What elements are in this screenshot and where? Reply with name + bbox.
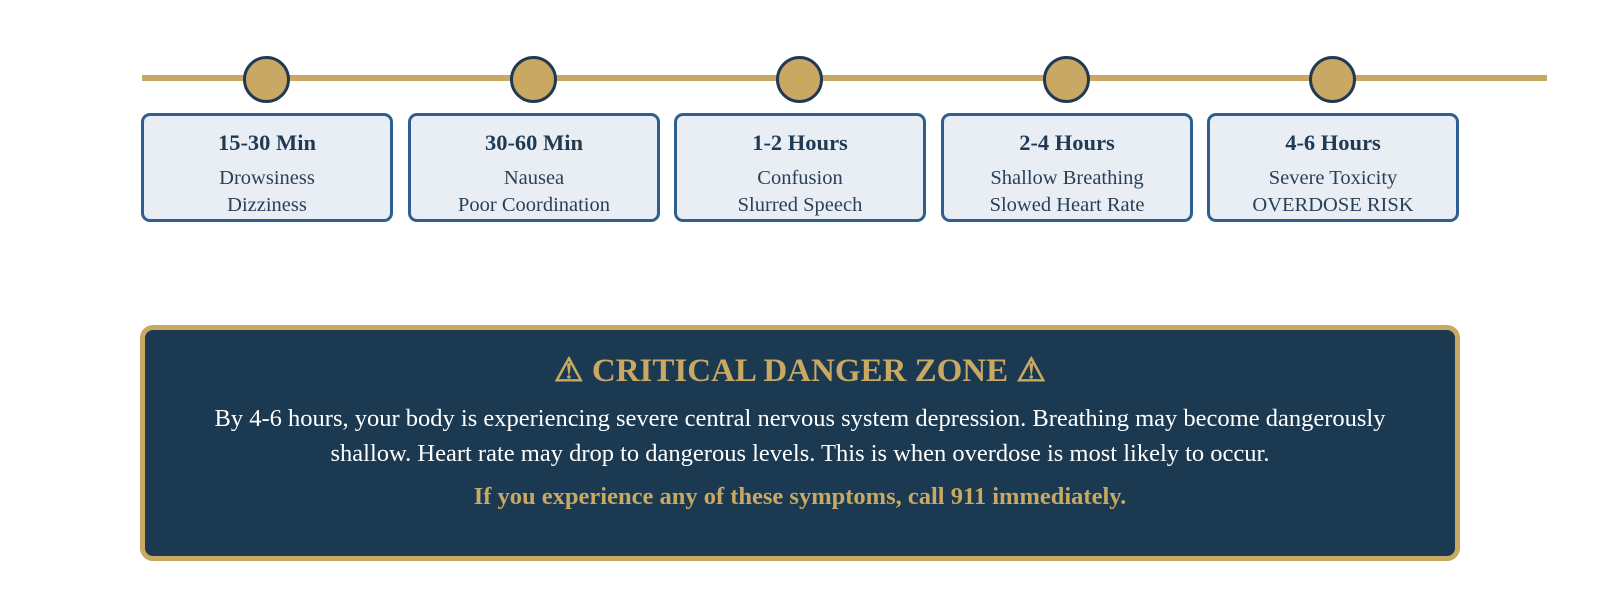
- marker 1: [243, 56, 290, 103]
- card: 2-4 hours: Slowed Heart Rate: [990, 194, 1144, 216]
- timeline line: [142, 75, 1547, 81]
- card: 4-6 hours: Severe Toxicity: [1269, 167, 1397, 189]
- card: 15-30 min: [141, 113, 393, 222]
- panel: critical danger zone: [140, 325, 1460, 561]
- card: 1-2 hours: [674, 113, 926, 222]
- card: 15-30 min: 15-30 Min: [218, 130, 316, 155]
- marker 2: [510, 56, 557, 103]
- card: 4-6 hours: OVERDOSE RISK: [1252, 194, 1414, 216]
- card: 4-6 hours: [1207, 113, 1459, 222]
- heading: ⚠ CRITICAL DANGER ZONE ⚠: [554, 353, 1046, 389]
- card: 2-4 hours: Shallow Breathing: [990, 167, 1144, 189]
- card: 4-6 hours: 4-6 Hours: [1285, 130, 1381, 155]
- card: 2-4 hours: 2-4 Hours: [1019, 130, 1115, 155]
- card: 1-2 hours: Slurred Speech: [738, 194, 862, 216]
- card: 30-60 min: Poor Coordination: [458, 194, 610, 216]
- marker 4: [1043, 56, 1090, 103]
- card: 15-30 min: Dizziness: [227, 194, 307, 216]
- card: 1-2 hours: 1-2 Hours: [752, 130, 848, 155]
- call to action: If you experience any of these symptoms, call 911 immediately.: [474, 483, 1126, 510]
- card: 15-30 min: Drowsiness: [219, 167, 315, 189]
- card: 1-2 hours: Confusion: [757, 167, 843, 189]
- marker 3: [776, 56, 823, 103]
- card: 30-60 min: Nausea: [504, 167, 564, 189]
- marker 5: [1309, 56, 1356, 103]
- card: 30-60 min: [408, 113, 660, 222]
- card: 2-4 hours: [941, 113, 1193, 222]
- card: 30-60 min: 30-60 Min: [485, 130, 583, 155]
- body text: By 4-6 hours, your body is experiencing severe central nervous system depression. Breathing may become dangerously shallow. Heart rate may drop to dangerous levels. This is when overdose is most likely to occur.: [215, 405, 1385, 467]
